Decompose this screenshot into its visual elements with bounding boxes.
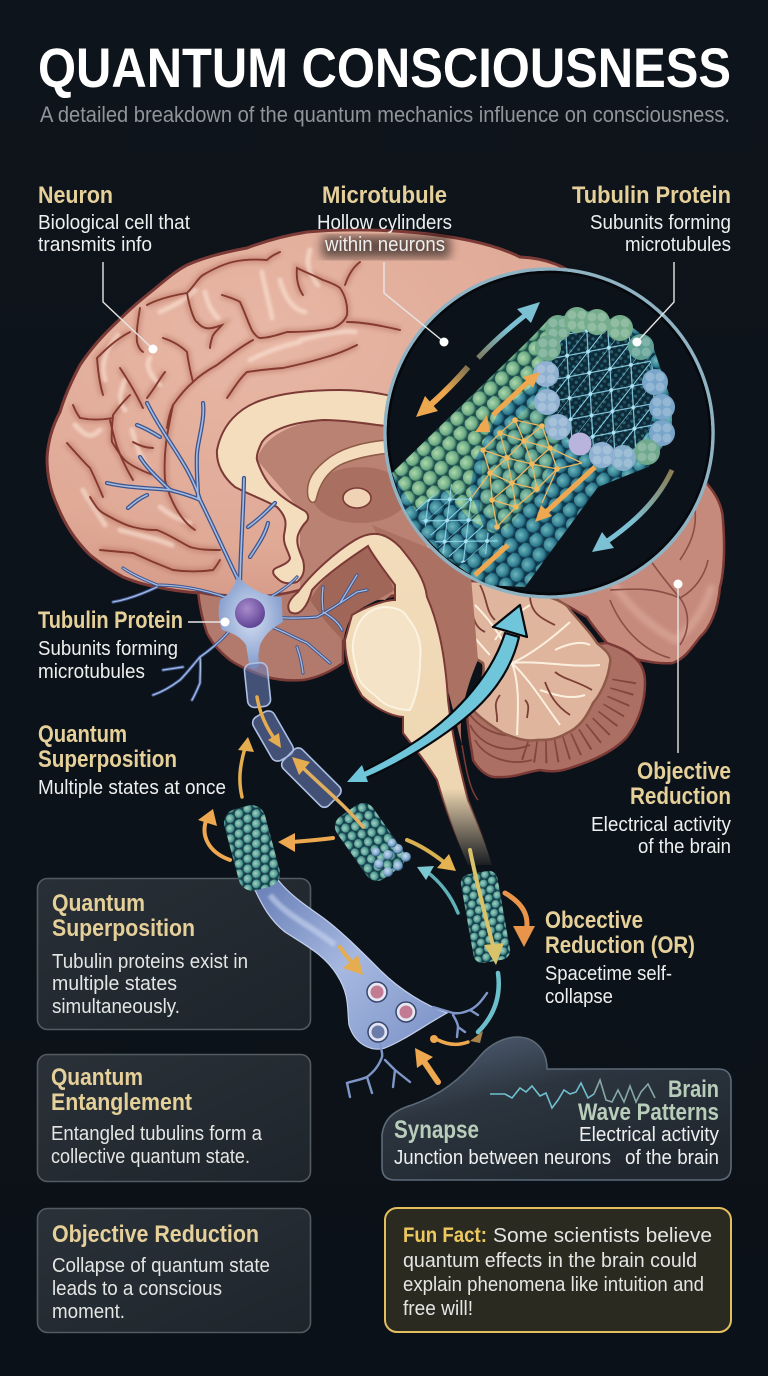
zoom circle: microtubule detail [385,269,713,597]
label: objective reduction: of the brain [638,836,731,858]
panel: objective reduction [38,1208,310,1332]
panel: quantum entanglement: collective quantum state. [51,1146,250,1168]
microtubule tube right [459,869,512,964]
blue lattice upper [547,329,655,451]
label: objective reduction: Electrical activity [591,814,731,836]
green under orange lattice [480,395,560,530]
label: neuron: Neuron [38,182,113,209]
panel: synapse and brain wave patterns: Wave Patterns [578,1099,719,1126]
teal arrow top [478,302,540,358]
panel: synapse and brain wave patterns: Electrical activity [579,1124,719,1146]
vesicles [367,982,387,1002]
label: tubulin protein top: Subunits forming [590,212,731,234]
label: obcective reduction (OR): Obcective [545,907,643,934]
brain wave line [490,1080,655,1108]
blue lattice lower [415,483,505,563]
inner dark region [257,420,430,600]
brain stem [288,534,492,865]
teal arrow bottom [592,470,672,552]
occipital lobe [540,440,724,663]
panel: quantum superposition [38,878,310,1030]
gyri highlights [75,250,355,545]
corpus callosum [217,390,400,583]
label: obcective reduction (OR): Spacetime self- [545,963,672,985]
orange arrow left [416,367,468,417]
panel: quantum entanglement: Entangled tubulins form a [51,1123,263,1145]
panel: fun fact: explain phenomena like intuition and [403,1274,704,1296]
label: neuron: transmits info [38,234,152,256]
panel: synapse and brain wave patterns: Junction between neurons [394,1147,611,1169]
panel: quantum entanglement: Entanglement [51,1089,192,1116]
panel: objective reduction: Objective Reduction [52,1221,259,1248]
microtubule tube left [221,802,283,894]
label: microtubule [317,182,452,258]
gyri folds [67,252,400,572]
brain illustration [47,230,724,865]
panel: quantum entanglement [38,1054,310,1182]
dark pocket [310,546,394,640]
big teal arrow [347,605,527,782]
label: quantum superposition: Multiple states at once [38,777,226,799]
label: objective reduction: Objective [637,758,731,785]
terminal branches [347,993,487,1097]
panel: synapse and brain wave patterns [382,1037,731,1180]
label: tubulin protein left: Tubulin Protein [38,607,183,634]
brain stem oval [353,607,420,710]
panel: synapse and brain wave patterns: of the brain [625,1147,719,1169]
neuron [107,403,367,700]
panel: objective reduction: leads to a conscious [52,1278,222,1300]
cerebrum [47,230,637,599]
axon arrows [257,697,276,741]
panel: fun fact: free will! [403,1298,473,1320]
thalamus [343,488,371,508]
panel: quantum superposition: Tubulin proteins exist in [52,951,248,973]
end ring subunits [533,307,675,471]
leader lines [103,262,682,753]
tube end cap [372,838,411,877]
label: neuron: Biological cell that [38,212,190,234]
wrap behind stem [372,525,478,745]
label: obcective reduction (OR): collapse [545,986,613,1008]
cerebellum arbor [452,581,610,741]
label: quantum superposition: Quantum [38,721,127,748]
fornix arc [307,439,400,502]
dark inner lattice [550,330,655,456]
label: objective reduction: Reduction [630,783,731,810]
panel: quantum superposition: Quantum [52,890,145,917]
panel: fun fact: Fun Fact: [403,1224,487,1247]
dendrites [107,403,367,700]
panel: fun fact [385,1208,731,1332]
panel: objective reduction: Collapse of quantum state [52,1255,270,1277]
label: obcective reduction (OR) [545,907,695,1008]
temporal lobe lower [198,590,387,680]
panel: fun fact: quantum effects in the brain could [403,1250,697,1272]
panel: quantum superposition: Superposition [52,915,195,942]
panel: synapse and brain wave patterns: Brain [668,1076,719,1103]
label: tubulin protein top [572,182,731,256]
axon segments [244,662,344,810]
gyri shading [67,252,400,572]
label: tubulin protein left [38,607,183,683]
label: quantum superposition [38,721,226,799]
label: objective reduction [591,758,731,858]
panel: synapse and brain wave patterns: Synapse [394,1116,479,1144]
terminal highlight [270,895,335,945]
inner arrows [475,378,595,575]
panel: objective reduction: moment. [52,1301,125,1323]
label: tubulin protein top: microtubules [625,234,731,256]
microtubule body [392,310,672,587]
label: microtubule: within neurons [324,234,445,256]
axon terminal [255,880,487,1097]
thalamus surround [312,467,408,523]
label: microtubule: Hollow cylinders [317,212,452,234]
flow arrows [198,605,535,1082]
label: microtubule: Microtubule [322,182,447,209]
panel: quantum entanglement: Quantum [51,1064,143,1091]
panel: fun fact: Some scientists believe [493,1225,712,1247]
green subunits band [392,320,558,535]
label: quantum superposition: Superposition [38,746,177,773]
soma [219,575,283,663]
microtubule tube middle [330,798,411,886]
cerebellum outer [467,643,645,777]
label: tubulin protein left: microtubules [38,661,145,683]
label: obcective reduction (OR): Reduction (OR) [545,932,695,959]
orange lattice [472,417,582,530]
panel: quantum superposition: multiple states [52,973,177,995]
label: neuron [38,182,190,256]
label: tubulin protein left: Subunits forming [38,638,178,660]
panel: quantum superposition: simultaneously. [52,996,180,1018]
label: tubulin protein top: Tubulin Protein [572,182,731,209]
nucleus [235,598,265,628]
